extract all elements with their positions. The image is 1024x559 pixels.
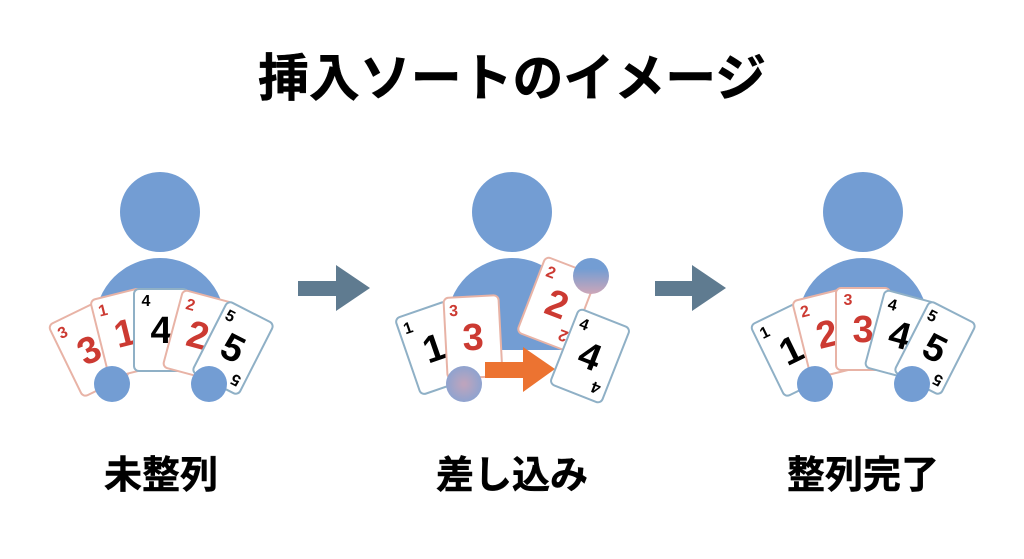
card 3: 3: [55, 324, 71, 343]
card 1: 1: [417, 326, 451, 372]
icon: person head: [120, 172, 200, 252]
card 5: 5: [924, 307, 940, 326]
card 4: [134, 289, 188, 371]
card 5: [192, 301, 274, 395]
card 2: 2: [539, 282, 574, 328]
icon: person head: [823, 172, 903, 252]
card 3: 3: [71, 327, 108, 374]
card 3: [836, 288, 890, 370]
card 5: [894, 301, 976, 395]
card 4: 4: [577, 316, 591, 335]
card 4: 4: [886, 296, 899, 315]
card 5: 5: [930, 370, 946, 389]
card 4: 4: [884, 313, 915, 359]
panel: inserting: [395, 172, 630, 404]
card 3: 3: [461, 316, 485, 360]
label: inserting: 差し込み: [436, 455, 588, 497]
card 2: [517, 256, 597, 352]
card 4: 4: [142, 293, 151, 310]
card 1: 1: [757, 324, 773, 343]
icon: person body: [452, 258, 561, 350]
arrow: step 2 to 3: [655, 265, 726, 311]
card 2: 2: [182, 313, 213, 359]
card 4: 4: [150, 310, 172, 352]
card 3: 3: [449, 303, 459, 320]
icon: person head: [472, 172, 552, 252]
card 5: 5: [214, 325, 251, 372]
icon: lower hand: [446, 366, 482, 402]
icon: left hand: [797, 366, 833, 402]
card 2: [163, 290, 233, 380]
icon: left hand: [94, 366, 130, 402]
card 4: 4: [572, 334, 607, 380]
card 3: [443, 295, 503, 379]
label: sorted: 整列完了: [787, 455, 939, 497]
card 5: 5: [222, 307, 238, 326]
card 5: 5: [916, 325, 953, 372]
card 3: [48, 303, 130, 397]
card 2: 2: [799, 303, 812, 321]
card 5: 5: [228, 370, 244, 389]
panel: unsorted: [48, 172, 274, 402]
label: unsorted: 未整列: [104, 455, 218, 497]
icon: person body: [803, 258, 924, 299]
icon: right hand: [894, 366, 930, 402]
card 2: 2: [184, 296, 197, 315]
card 1: [90, 288, 160, 378]
card 2: 2: [812, 312, 843, 358]
title: 挿入ソートのイメージ: [258, 50, 766, 107]
card 3: 3: [852, 309, 874, 351]
card 1: 1: [401, 319, 415, 338]
card 1: 1: [110, 311, 141, 357]
icon: right hand: [191, 366, 227, 402]
panel: sorted: [750, 172, 976, 402]
card 2: [792, 289, 862, 379]
card 1: 1: [97, 302, 110, 320]
arrow: step 1 to 2: [298, 265, 370, 311]
card 3: 3: [844, 292, 853, 309]
card 2: 2: [556, 325, 571, 344]
card 1: 1: [773, 327, 810, 374]
card 4: 4: [589, 377, 603, 396]
card 4: [550, 308, 630, 404]
card 1: [395, 301, 473, 395]
icon: person body: [100, 258, 220, 299]
arrow: insertion: [485, 347, 555, 392]
card 2: 2: [543, 264, 558, 283]
card 4: [865, 290, 935, 380]
icon: upper hand: [573, 258, 609, 294]
card 1: [750, 303, 832, 397]
